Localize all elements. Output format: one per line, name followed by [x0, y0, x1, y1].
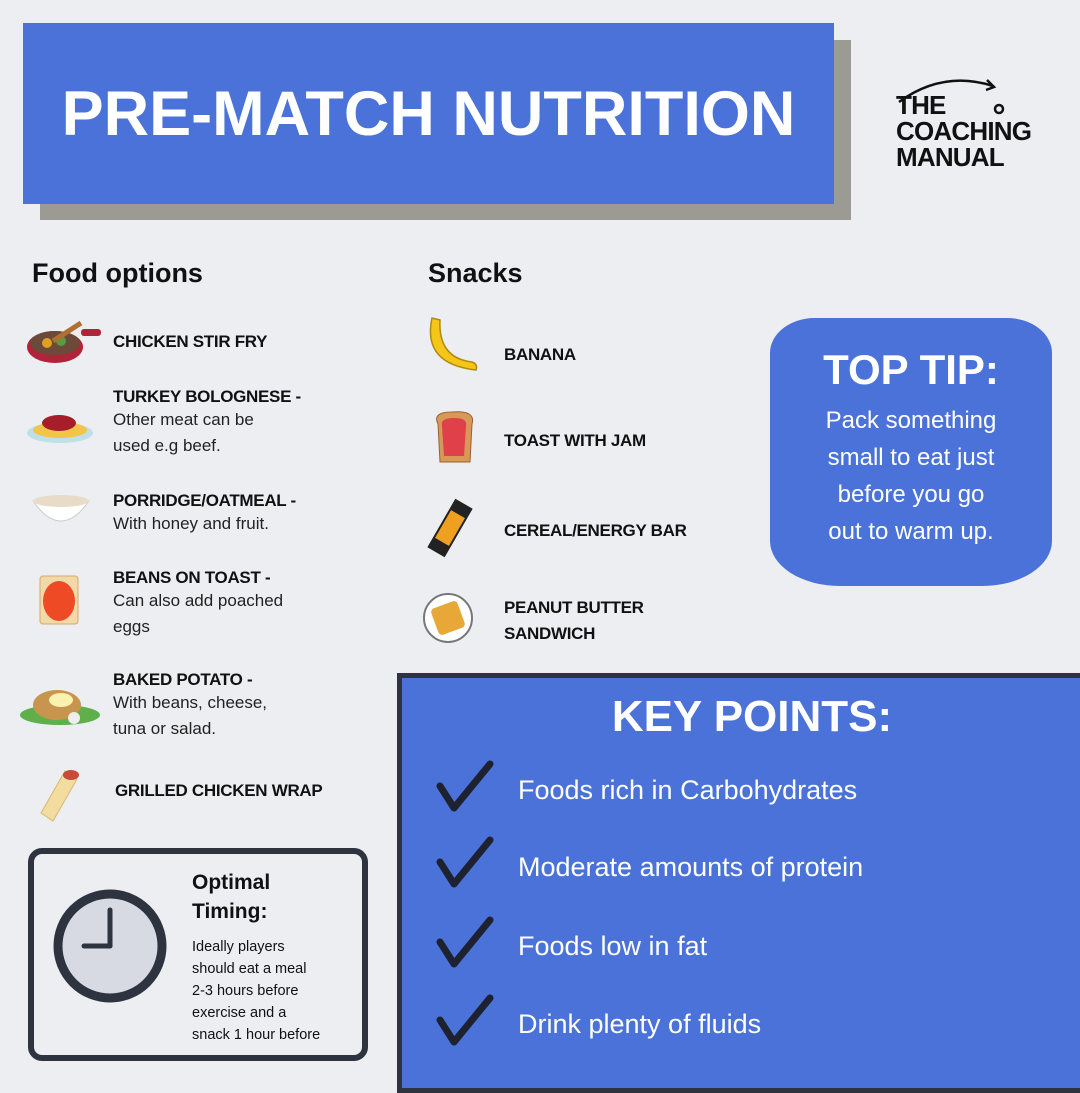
text: turkey bolognese: TURKEY BOLOGNESE -: [113, 387, 301, 406]
text: baked potato: BAKED POTATO -: [113, 670, 252, 689]
icon: bolognese: [27, 415, 93, 443]
timing heading: [192, 871, 270, 923]
icon: peanut butter sandwich: [423, 593, 473, 643]
checklist: [436, 760, 863, 1046]
top tip text: small to eat just: [828, 444, 994, 471]
title shadow: [40, 40, 851, 220]
text: turkey bolognese: used e.g beef.: [113, 436, 221, 455]
icon: stir fry pan: [27, 320, 101, 363]
panel: key points: [397, 673, 1080, 1093]
checklist: Drink plenty of fluids: [518, 1009, 761, 1039]
icon: toast with jam: [436, 411, 474, 462]
text: baked potato: tuna or salad.: [113, 719, 216, 738]
top tip card: [770, 318, 1052, 586]
title banner: PRE-MATCH NUTRITION: [62, 78, 795, 148]
icon: porridge bowl: [32, 495, 90, 522]
text: baked potato: [113, 670, 267, 738]
text: grilled chicken wrap: GRILLED CHICKEN WRAP: [115, 781, 322, 800]
text: peanut butter sandwich: SANDWICH: [504, 624, 595, 643]
text: porridge: [113, 491, 296, 533]
logo: COACHING: [896, 116, 1031, 146]
food list: [20, 320, 322, 822]
top tip text: [826, 407, 996, 545]
title banner: [23, 23, 834, 204]
logo: [896, 79, 1031, 172]
logo: THE: [896, 90, 946, 120]
text: turkey bolognese: Other meat can be: [113, 410, 254, 429]
checklist: Moderate amounts of protein: [518, 852, 863, 882]
key points heading: KEY POINTS:: [612, 692, 892, 741]
text: porridge: With honey and fruit.: [113, 514, 269, 533]
icon: wrap: [40, 770, 79, 822]
text: beans on toast: Can also add poached: [113, 591, 283, 610]
icon: baked potato: [20, 690, 100, 725]
text: toast with jam: TOAST WITH JAM: [504, 431, 646, 450]
timing heading: Timing:: [192, 900, 267, 923]
logo: MANUAL: [896, 142, 1004, 172]
icon: energy bar: [427, 498, 473, 558]
heading: food options: Food options: [32, 258, 203, 288]
heading: snacks: Snacks: [428, 258, 523, 288]
text: beans on toast: BEANS ON TOAST -: [113, 568, 270, 587]
top tip text: before you go: [838, 481, 984, 508]
timing text: [192, 939, 320, 1043]
timing text: exercise and a: [192, 1005, 286, 1021]
text: turkey bolognese: [113, 387, 301, 455]
text: beans on toast: [113, 568, 283, 636]
icon: beans on toast: [40, 576, 78, 624]
top tip text: Pack something: [826, 407, 996, 434]
icon: clock: [54, 890, 166, 1002]
timing text: Ideally players: [192, 939, 285, 955]
icon: banana: [430, 317, 478, 371]
checklist: Foods low in fat: [518, 931, 707, 961]
timing text: 2-3 hours before: [192, 983, 298, 999]
panel: optimal timing: [28, 848, 368, 1061]
snacks list: [423, 317, 687, 643]
timing heading: Optimal: [192, 871, 270, 894]
text: peanut butter sandwich: PEANUT BUTTER: [504, 598, 644, 617]
text: cereal bar: CEREAL/ENERGY BAR: [504, 521, 687, 540]
checklist: Foods rich in Carbohydrates: [518, 775, 857, 805]
text: peanut butter sandwich: [504, 598, 644, 643]
text: baked potato: With beans, cheese,: [113, 693, 267, 712]
text: chicken stir fry: CHICKEN STIR FRY: [113, 332, 267, 351]
timing text: should eat a meal: [192, 961, 306, 977]
timing text: snack 1 hour before: [192, 1027, 320, 1043]
text: porridge: PORRIDGE/OATMEAL -: [113, 491, 296, 510]
top tip text: out to warm up.: [828, 518, 994, 545]
text: banana: BANANA: [504, 345, 576, 364]
text: beans on toast: eggs: [113, 617, 150, 636]
top tip heading: TOP TIP:: [823, 346, 999, 393]
